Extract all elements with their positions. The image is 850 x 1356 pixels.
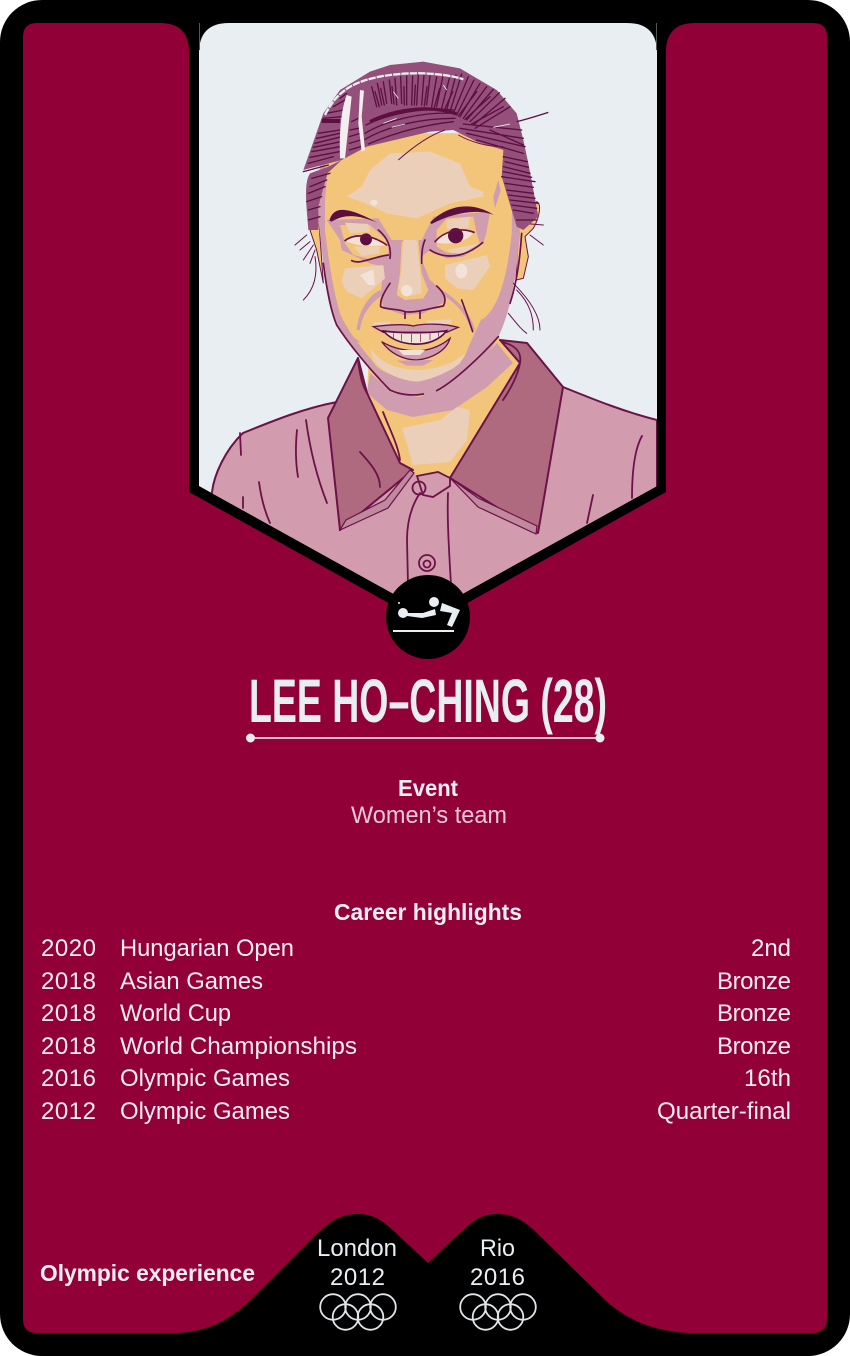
- left collar: [328, 358, 413, 530]
- career highlights table: 2nd: [751, 935, 791, 962]
- cheek highlights: [342, 265, 385, 298]
- left socket shade: [327, 218, 392, 297]
- portrait illustration: [190, 23, 657, 640]
- neck highlight: [402, 407, 470, 465]
- rio 2016: 2016: [470, 1264, 525, 1291]
- career highlights table: Bronze: [717, 968, 791, 995]
- career highlights table: Quarter-final: [657, 1098, 791, 1125]
- london 2012: London: [317, 1235, 397, 1262]
- face skin: [325, 133, 513, 378]
- eyes: [346, 236, 386, 246]
- mouth: [373, 319, 458, 366]
- career highlights table: Bronze: [717, 1000, 791, 1027]
- right socket shade: [422, 212, 490, 258]
- face base shade: [318, 133, 520, 395]
- eyebrows: [329, 210, 377, 223]
- forehead crease: [398, 130, 503, 160]
- hair mass: [303, 62, 538, 230]
- career highlights table: 2018: [41, 968, 96, 995]
- career highlights table: World Championships: [120, 1033, 357, 1060]
- neck shadow: [367, 343, 513, 417]
- icon: olympic rings: [460, 1294, 536, 1330]
- career highlights table: Asian Games: [120, 968, 263, 995]
- career highlights table: 16th: [744, 1065, 791, 1092]
- icon: olympic rings: [320, 1294, 396, 1330]
- title: LEE HO–CHING (28): [249, 667, 607, 735]
- career highlights table: Hungarian Open: [120, 935, 294, 962]
- smile folds: [357, 290, 383, 330]
- stray hairs: [295, 223, 543, 333]
- face lines: [323, 230, 522, 395]
- title underline: [246, 734, 604, 742]
- career highlights table: Olympic Games: [120, 1098, 290, 1125]
- hair highlight flecks: [383, 85, 510, 127]
- right collar: [450, 340, 563, 533]
- career highlights table: [41, 935, 791, 1125]
- career highlights table: 2018: [41, 1000, 96, 1027]
- rio 2016: [460, 1235, 536, 1330]
- neck: [367, 335, 520, 476]
- london 2012: [317, 1235, 397, 1330]
- face, drawn in magnified local coordinates: [295, 133, 543, 395]
- career highlights table: Bronze: [717, 1033, 791, 1060]
- career highlights table: 2016: [41, 1065, 96, 1092]
- rio 2016: Rio: [480, 1235, 515, 1262]
- event block: [351, 775, 507, 829]
- ears: [310, 213, 323, 283]
- event block: Women’s team: [351, 802, 507, 829]
- career highlights table: 2018: [41, 1033, 96, 1060]
- chin highlight: [370, 347, 465, 382]
- forehead highlight: [347, 152, 483, 218]
- career highlights table: 2020: [41, 935, 96, 962]
- nose: [380, 240, 445, 315]
- photo edge ticks: [200, 23, 656, 50]
- forehead side shade: [318, 172, 327, 223]
- career highlights table: 2012: [41, 1098, 96, 1125]
- event block: Event: [398, 775, 458, 801]
- sport badge: [386, 575, 470, 659]
- shirt: [210, 386, 657, 594]
- london 2012: 2012: [330, 1264, 385, 1291]
- icon: table tennis player: [393, 597, 460, 632]
- hair, drawn in magnified local coordinates: [303, 62, 548, 230]
- collar folds and shirt seams: [240, 342, 642, 585]
- career highlights table: World Cup: [120, 1000, 231, 1027]
- hair clips: [340, 95, 352, 158]
- hair strands: [303, 74, 538, 220]
- career highlights table: Olympic Games: [120, 1065, 290, 1092]
- career highlights heading: Career highlights: [334, 899, 522, 925]
- top hair band: [325, 73, 463, 115]
- olympic experience label: Olympic experience: [40, 1260, 255, 1286]
